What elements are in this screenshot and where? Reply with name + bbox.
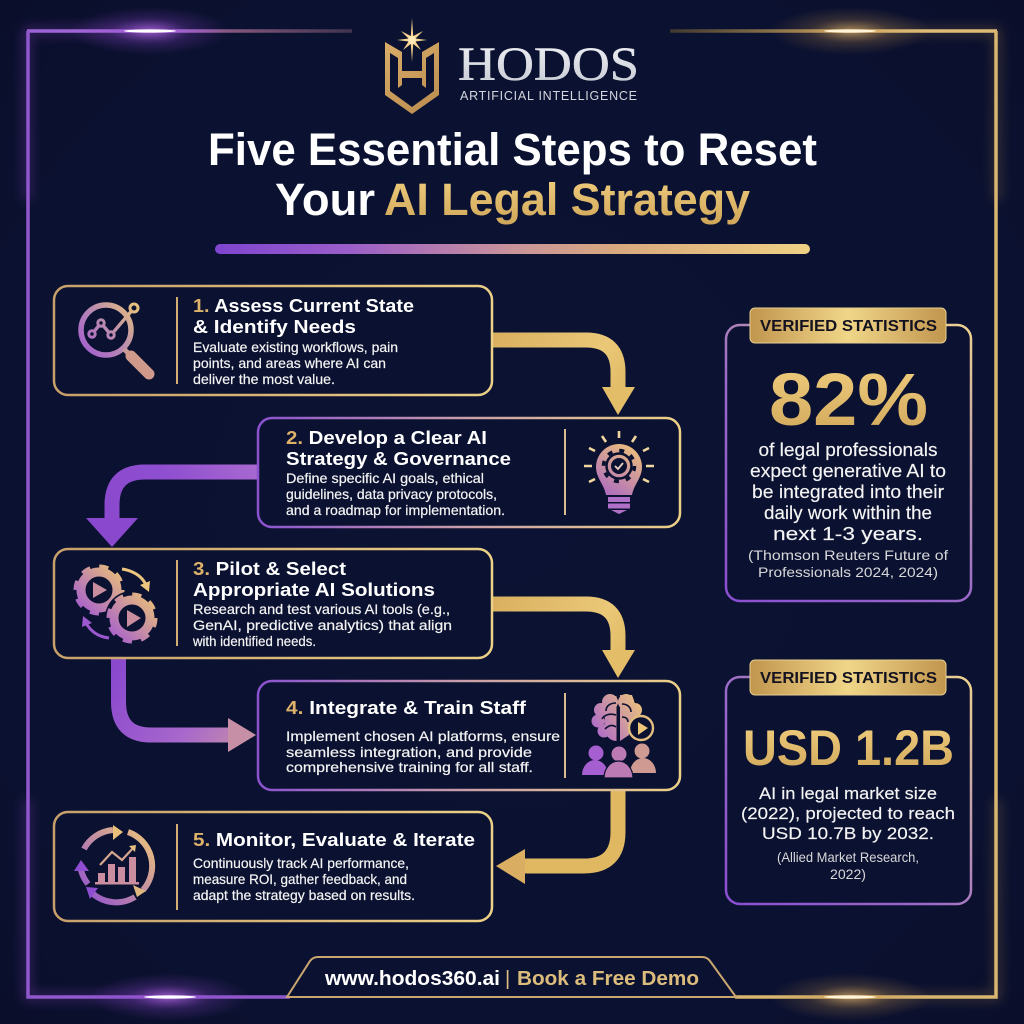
- statistic description: be integrated into their: [752, 482, 944, 502]
- source citation: (Allied Market Research,: [777, 849, 919, 865]
- panel: statistic 82%: [726, 308, 971, 601]
- body text: guidelines, data privacy protocols,: [286, 487, 497, 502]
- statistic description: expect generative AI to: [750, 461, 946, 481]
- big number: 82%: [769, 358, 928, 441]
- body text: deliver the most value.: [193, 372, 335, 387]
- title: AI Legal Strategy: [384, 174, 750, 225]
- badge: verified statistics: VERIFIED STATISTICS: [760, 318, 937, 335]
- logo: Hodos AI: [385, 18, 639, 114]
- icon: gears with play symbols: [76, 568, 159, 645]
- panel: step 3: [54, 549, 492, 658]
- icon: shield monogram with star: [385, 18, 439, 114]
- heading: 3. Pilot & Select: [193, 558, 346, 579]
- heading: 1. Assess Current State: [193, 295, 414, 316]
- icon: cycle with growth chart: [74, 825, 152, 902]
- panel: step 2: [258, 418, 680, 527]
- source citation: [777, 849, 919, 882]
- badge: verified statistics: VERIFIED STATISTICS: [760, 670, 937, 687]
- body text: Define specific AI goals, ethical: [286, 471, 484, 486]
- source citation: (Thomson Reuters Future of: [748, 547, 948, 563]
- icon: magnifier with chart: [81, 304, 149, 374]
- panel: step 2: Strategy & Governance: [286, 448, 511, 469]
- body text: comprehensive training for all staff.: [286, 760, 533, 775]
- title: Five Essential Steps to Reset: [208, 124, 817, 175]
- body text: points, and areas where AI can: [193, 356, 386, 371]
- title: [208, 124, 817, 225]
- body text: with identified needs.: [192, 634, 316, 649]
- title: Your: [275, 174, 375, 225]
- tagline: ARTIFICIAL INTELLIGENCE: [460, 89, 637, 103]
- heading: 4. Integrate & Train Staff: [286, 697, 527, 718]
- panel: step 1: & Identify Needs: [193, 316, 356, 337]
- arrow: step 2 to step 3: [86, 472, 258, 547]
- body text: [286, 471, 505, 518]
- source citation: [748, 547, 948, 580]
- body text: Implement chosen AI platforms, ensure: [286, 729, 560, 744]
- statistic description: AI in legal market size: [759, 784, 937, 803]
- footer banner: |: [505, 968, 510, 990]
- badge: verified statistics: [750, 308, 946, 343]
- statistic description: daily work within the: [764, 503, 932, 523]
- footer banner: www.hodos360.ai: [324, 968, 500, 990]
- panel: step 4: [258, 681, 680, 790]
- body text: [193, 340, 398, 387]
- source citation: 2022): [830, 866, 866, 882]
- arrow: step 3 to step 4 purple: [118, 658, 256, 752]
- statistic description: [750, 440, 946, 544]
- badge: verified statistics: [750, 660, 946, 695]
- icon: brain over team: [582, 694, 656, 778]
- body text: measure ROI, gather feedback, and: [193, 872, 407, 887]
- arrow: step 3 to step 4: [492, 604, 635, 678]
- body text: and a roadmap for implementation.: [286, 503, 505, 518]
- panel: step 5: [54, 812, 492, 921]
- statistic description: of legal professionals: [758, 440, 938, 460]
- statistic description: (2022), projected to reach: [741, 804, 955, 823]
- arrow: step 1 to step 2: [492, 340, 635, 415]
- icon: light bulb with gear: [584, 431, 654, 514]
- source citation: Professionals 2024, 2024): [758, 564, 938, 580]
- body text: adapt the strategy based on results.: [193, 888, 415, 903]
- footer banner: Book a Free Demo: [517, 968, 699, 990]
- heading: 2. Develop a Clear AI: [286, 427, 487, 448]
- footer banner: [287, 957, 736, 997]
- statistic description: next 1-3 years.: [773, 524, 923, 544]
- heading: 5. Monitor, Evaluate & Iterate: [193, 829, 475, 850]
- panel: step 3: Appropriate AI Solutions: [193, 579, 435, 600]
- body text: seamless integration, and provide: [286, 745, 532, 760]
- wordmark: HODOS: [458, 38, 639, 91]
- panel: statistic USD 1.2B: [726, 660, 971, 904]
- body text: Evaluate existing workflows, pain: [193, 340, 398, 355]
- title divider bar: [215, 244, 810, 254]
- body text: Continuously track AI performance,: [193, 856, 409, 871]
- statistic description: USD 10.7B by 2032.: [762, 824, 934, 843]
- body text: [192, 602, 452, 649]
- body text: [286, 729, 560, 775]
- arrow: step 4 to step 5: [496, 790, 618, 884]
- panel: step 1: [54, 286, 492, 395]
- body text: [193, 856, 415, 903]
- big number: USD 1.2B: [743, 720, 954, 776]
- statistic description: [741, 784, 955, 843]
- body text: Research and test various AI tools (e.g.,: [193, 602, 450, 617]
- body text: GenAI, predictive analytics) that align: [193, 618, 452, 633]
